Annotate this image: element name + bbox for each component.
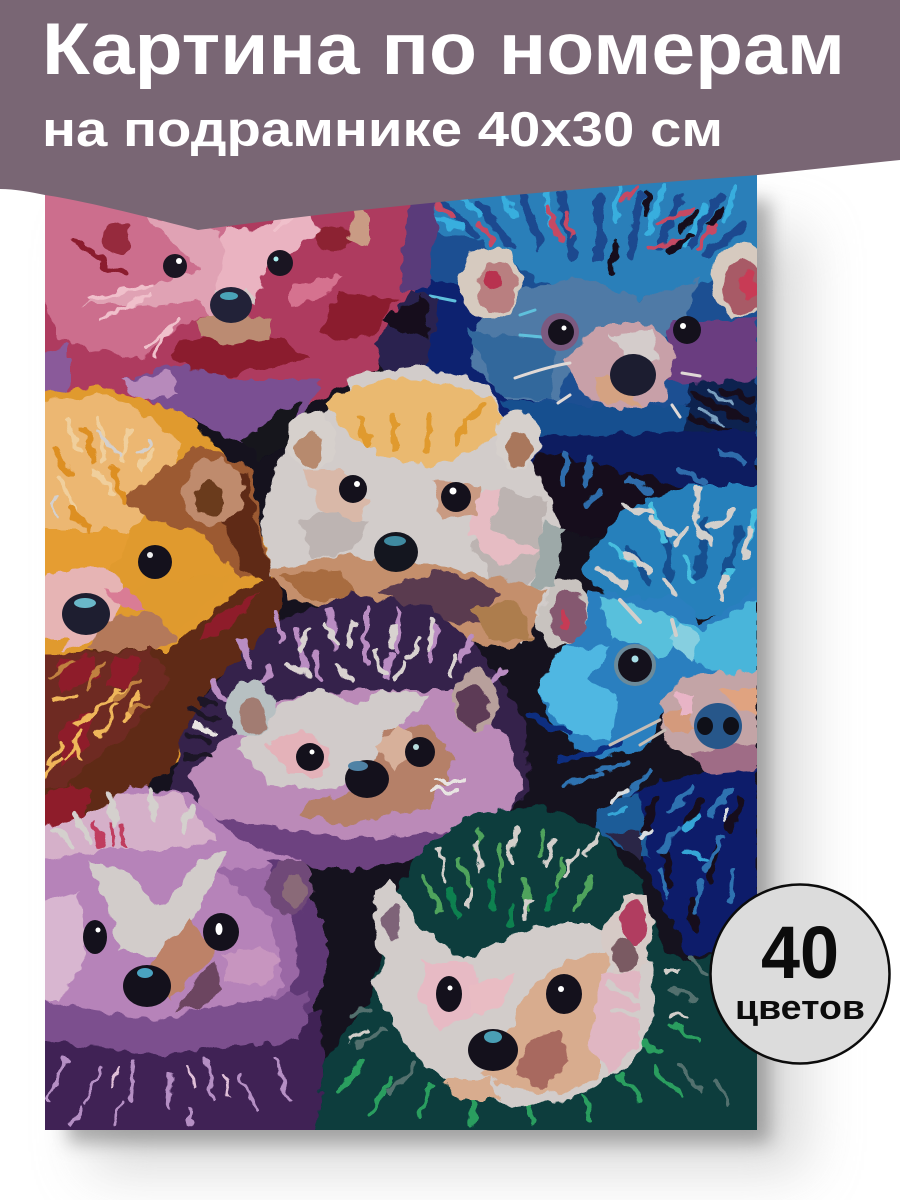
ear left <box>459 245 521 321</box>
ear left <box>226 680 274 736</box>
title: Картина по номерам <box>42 9 845 90</box>
ear <box>535 577 589 647</box>
hedgehog: light blue right <box>530 485 770 775</box>
ear <box>268 859 312 915</box>
hedgehog: white with yellow crown <box>262 365 565 650</box>
ear right <box>600 895 655 975</box>
hedgehog: pink top left <box>45 195 440 443</box>
ear right <box>452 670 498 730</box>
badge: 40 colours: 40 <box>761 911 839 994</box>
ear right <box>710 242 757 320</box>
subtitle: на подрамнике 40х30 см <box>42 103 723 157</box>
badge: 40 colours <box>710 884 890 1064</box>
hedgehog: blue top right <box>414 175 757 509</box>
hedgehog: lower right dark blue <box>560 760 757 960</box>
ear left <box>287 410 324 469</box>
hedgehog: purple middle <box>170 595 530 870</box>
ear right <box>496 410 540 470</box>
hedgehog: purple bottom left <box>40 785 330 1135</box>
ear left <box>372 878 430 958</box>
hedgehog: orange left <box>40 385 280 840</box>
painting on canvas <box>40 165 770 1135</box>
whiskers <box>515 363 700 417</box>
canvas shadow <box>68 200 805 1170</box>
hedgehog: green bottom <box>315 805 765 1135</box>
top banner <box>0 0 900 230</box>
ear <box>183 458 243 526</box>
badge: 40 colours: цветов <box>735 989 865 1027</box>
